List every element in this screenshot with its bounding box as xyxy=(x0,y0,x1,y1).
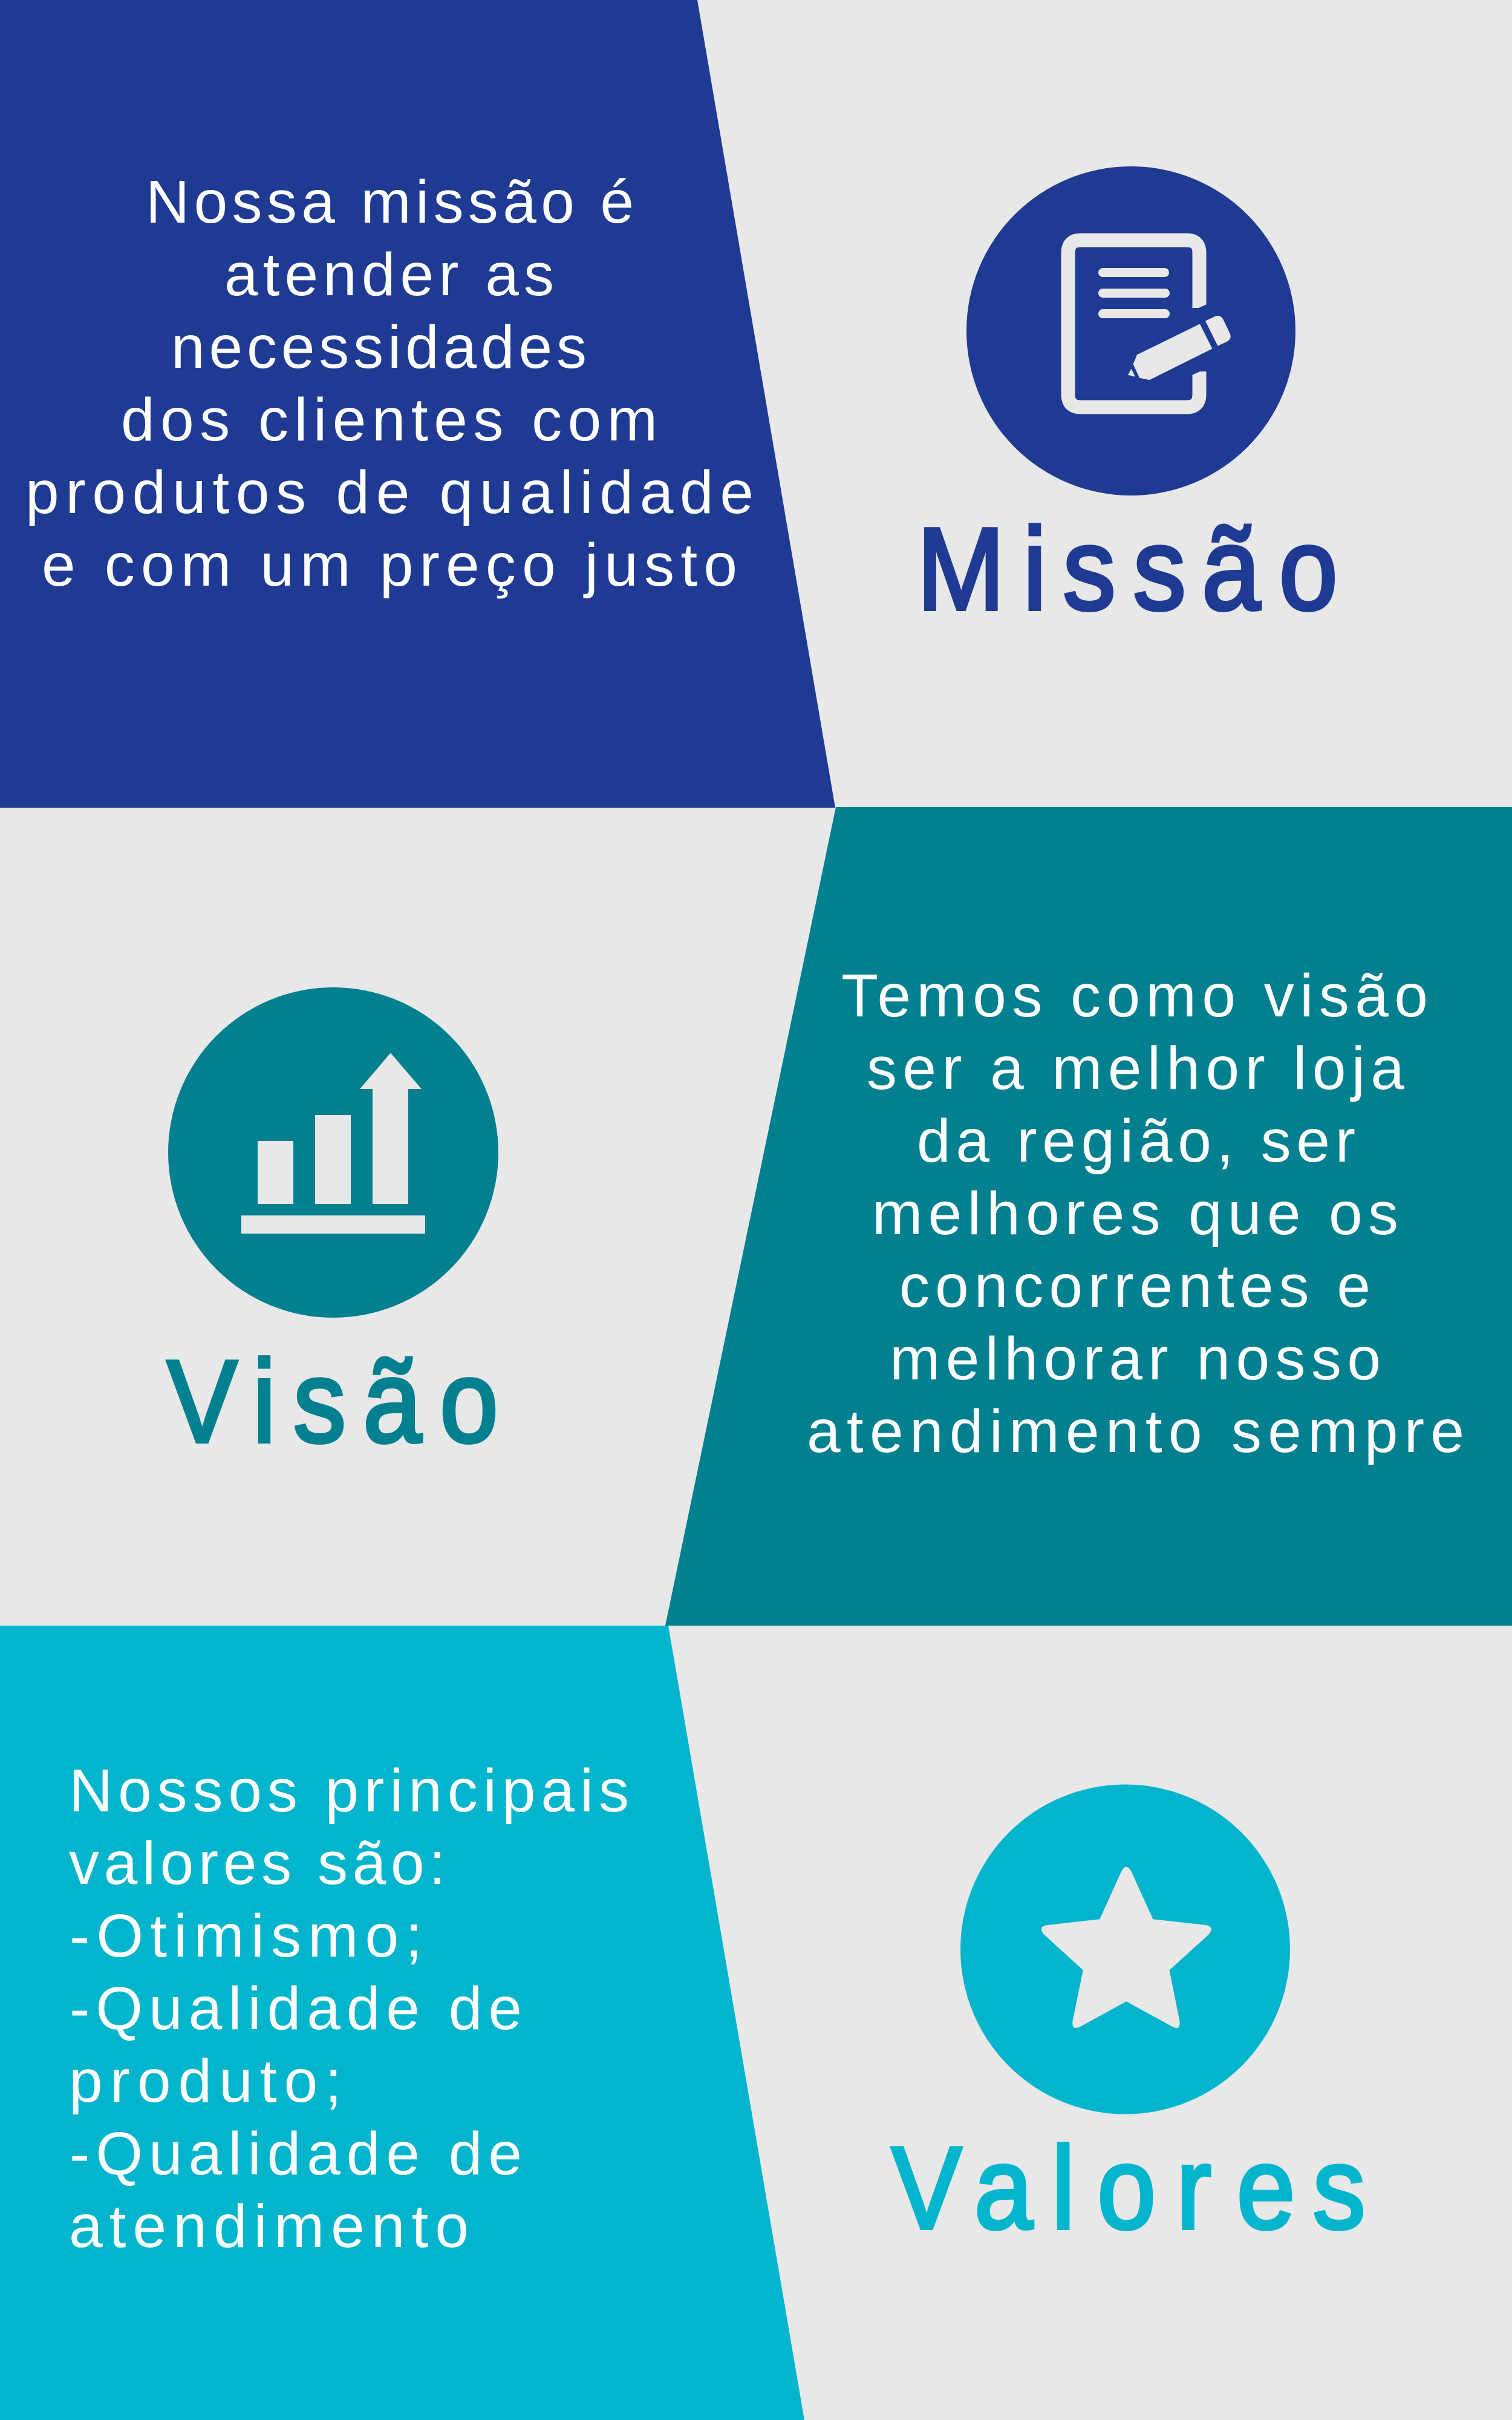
text block: missão statement: atender as xyxy=(224,241,554,309)
text block: missão statement: produtos de qualidade xyxy=(25,459,754,526)
text block: valores list: -Otimismo; xyxy=(70,1902,422,1970)
icon: document with pencil xyxy=(966,166,1295,495)
text block: visão statement: da região, ser xyxy=(917,1107,1355,1175)
icon: star xyxy=(960,1785,1290,2114)
icon: bar chart with arrow xyxy=(168,987,498,1318)
text block: valores list: Nossos principais xyxy=(69,1757,629,1825)
text block: valores list: valores são: xyxy=(69,1830,446,1897)
text block: visão statement: melhores que os xyxy=(872,1180,1398,1248)
text block: missão statement xyxy=(25,168,754,599)
panel: valores text background xyxy=(0,1626,804,2420)
panel: missão text background xyxy=(0,0,835,808)
text block: visão statement: Temos como visão xyxy=(841,962,1428,1030)
text block: visão statement: melhorar nosso xyxy=(890,1325,1381,1393)
text block: missão statement: Nossa missão é xyxy=(146,168,634,236)
text block: visão statement: concorrentes e xyxy=(899,1252,1370,1320)
text block: missão statement: e com um preço justo xyxy=(42,531,737,599)
panel: visão text background xyxy=(665,807,1512,1626)
text block: valores list: atendimento xyxy=(69,2193,469,2260)
text block: valores list xyxy=(69,1757,629,2260)
heading: Missão: Missão xyxy=(917,504,1338,634)
heading: Visão: Visão xyxy=(167,1336,498,1467)
text block: visão statement: atendimento sempre xyxy=(807,1398,1464,1465)
text block: valores list: -Qualidade de xyxy=(70,1975,522,2042)
text block: visão statement: ser a melhor loja xyxy=(867,1035,1404,1102)
text block: missão statement: dos clientes com xyxy=(121,386,657,454)
text block: valores list: -Qualidade de xyxy=(70,2120,522,2188)
heading: Valores: Valores xyxy=(891,2123,1366,2253)
text block: valores list: produto; xyxy=(69,2047,342,2115)
text block: visão statement xyxy=(807,962,1464,1465)
text block: missão statement: necessidades xyxy=(171,313,587,381)
